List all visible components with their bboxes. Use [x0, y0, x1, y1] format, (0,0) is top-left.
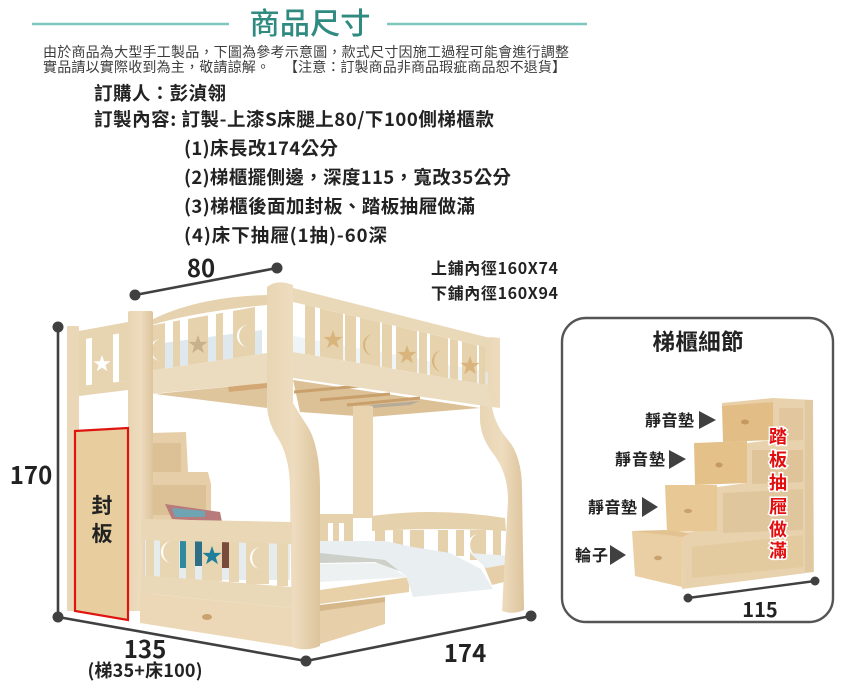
order details text block: (2)梯櫃擺側邊，深度115，寬改35公分 [184, 164, 511, 190]
order details text block: (4)床下抽屜(1抽)-60深 [184, 222, 387, 248]
stair cabinet illustration [632, 398, 814, 589]
rear centre post [353, 406, 373, 518]
dimension: depth 80: 80 [187, 249, 215, 284]
inner bed size notes: 下鋪內徑160X94 [431, 280, 558, 304]
dimension: depth 80 [130, 249, 282, 300]
red label: 踏板抽屜做滿: 板 [769, 446, 787, 472]
dimension: width 135: (梯35+床100) [88, 657, 202, 683]
red label: 踏板抽屜做滿: 踏 [769, 423, 787, 449]
label: 封板: 封 [92, 490, 112, 520]
lower bunk front with drawer [140, 504, 292, 647]
order details text block: (3)梯櫃後面加封板、踏板抽屜做滿 [184, 193, 475, 219]
red highlighted back panel [75, 428, 128, 620]
callout: 靜音墊 top [645, 407, 716, 431]
mattress and blanket [320, 541, 515, 597]
intro note text: 實品請以實際收到為主，敬請諒解。 [43, 57, 270, 77]
dimension: height 170: 170 [10, 456, 52, 491]
order details text block [94, 80, 511, 248]
dimension: cabinet width 115: 115 [742, 594, 778, 623]
red label: 踏板抽屜做滿: 屜 [769, 493, 787, 519]
dimension: height 170 [10, 322, 64, 622]
rear left post [67, 326, 79, 611]
order details text block: 訂購人：彭湞翎 [94, 80, 226, 106]
intro note text [43, 42, 569, 77]
callout: 靜音墊 middle: 靜音墊 [615, 446, 665, 470]
inner bed size notes: 上鋪內徑160X74 [431, 255, 558, 279]
panel heading: 梯櫃細節 [652, 325, 744, 357]
label: 封板: 板 [92, 518, 112, 548]
intro note text: 【注意：訂製商品非商品瑕疵商品恕不退貨】 [284, 57, 566, 77]
dimension: cabinet width 115 [684, 576, 820, 623]
intro note text: 由於商品為大型手工製品，下圖為參考示意圖，款式尺寸因施工過程可能會進行調整 [43, 42, 569, 62]
callout: 靜音墊 top: 靜音墊 [645, 407, 694, 431]
long side rail of upper bunk [293, 288, 492, 407]
red label: 踏板抽屜做滿 [769, 423, 787, 563]
right bed frame [320, 563, 520, 604]
callout: 靜音墊 lower: 靜音墊 [588, 494, 637, 518]
callout: 輪子: 輪子 [575, 542, 608, 566]
dimension: length 174: 174 [444, 634, 486, 669]
red label: 踏板抽屜做滿: 做 [769, 516, 787, 542]
stair steps behind the front post [150, 432, 211, 520]
front left post [128, 311, 153, 611]
stair side railing [79, 322, 128, 396]
dimension: length 174 [300, 610, 536, 669]
label: 封板 [92, 490, 112, 548]
under-bed drawer side [320, 597, 385, 644]
centre curved post [267, 282, 320, 649]
red label: 踏板抽屜做滿: 滿 [769, 537, 787, 563]
dimension: width 135: 135 [124, 630, 166, 665]
callout: 輪子 [575, 542, 626, 566]
title: 商品尺寸: 商品尺寸 [250, 0, 370, 43]
bunk bed illustration [67, 282, 524, 649]
panel: stair cabinet detail [562, 318, 833, 623]
right curved post [480, 337, 524, 613]
underside and slats of upper bunk [155, 380, 480, 417]
lower back rail [320, 512, 506, 560]
order details text block: 訂製內容: 訂製-上漆S床腿上80/下100側梯櫃款 [94, 106, 494, 132]
order details text block: (1)床長改174公分 [184, 135, 338, 161]
dimension: width 135 [58, 617, 306, 683]
head rail of upper bunk [142, 295, 267, 394]
red label: 踏板抽屜做滿: 抽 [769, 469, 787, 495]
inner bed size notes [431, 255, 558, 304]
